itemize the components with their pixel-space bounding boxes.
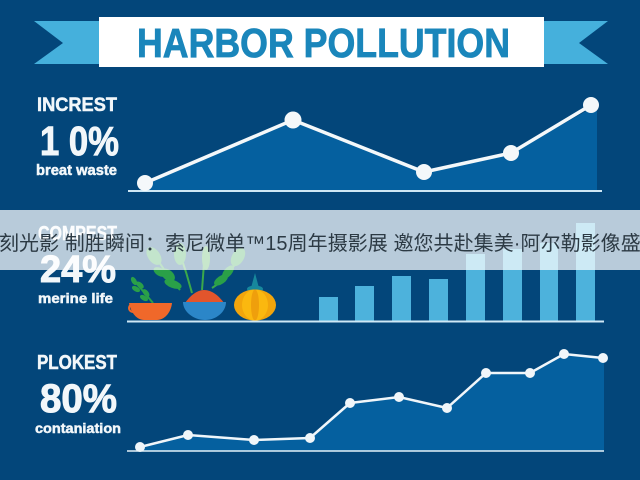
stat block: increst 10%: 1 0% — [40, 118, 119, 164]
stat block: plokest 80% — [35, 352, 121, 436]
stat block: increst 10%: INCREST — [37, 95, 117, 116]
icon: pumpkin — [234, 273, 276, 320]
stat block: increst 10% — [36, 95, 119, 179]
area chart: contamination — [127, 349, 608, 452]
stat block: compest 24%: 24% — [40, 249, 116, 291]
area chart: breat waste — [128, 97, 602, 191]
icon: cup with sprig — [129, 276, 172, 320]
stat block: plokest 80%: contaniation — [35, 420, 121, 436]
title banner: HARBOR POLLUTION — [137, 20, 510, 66]
stat block: plokest 80%: PLOKEST — [37, 352, 117, 374]
translucent caption band — [0, 210, 640, 270]
icon: plant fronds — [143, 243, 248, 293]
icon: potted plants and pumpkin — [129, 243, 276, 320]
stat block: compest 24%: merine life — [38, 290, 113, 306]
title banner — [34, 17, 608, 67]
stat block: compest 24% — [38, 223, 117, 306]
translucent caption band: 刻光影 制胜瞬间：索尼微单™15周年摄影展 邀您共赴集美·阿尔勒影像盛 — [0, 233, 640, 255]
icon: blue bowl of red berries — [183, 290, 226, 320]
stat block: compest 24%: COMPEST — [38, 223, 117, 245]
stat block: plokest 80%: 80% — [40, 377, 117, 421]
stat block: increst 10%: breat waste — [36, 162, 117, 179]
bar chart — [127, 223, 604, 322]
